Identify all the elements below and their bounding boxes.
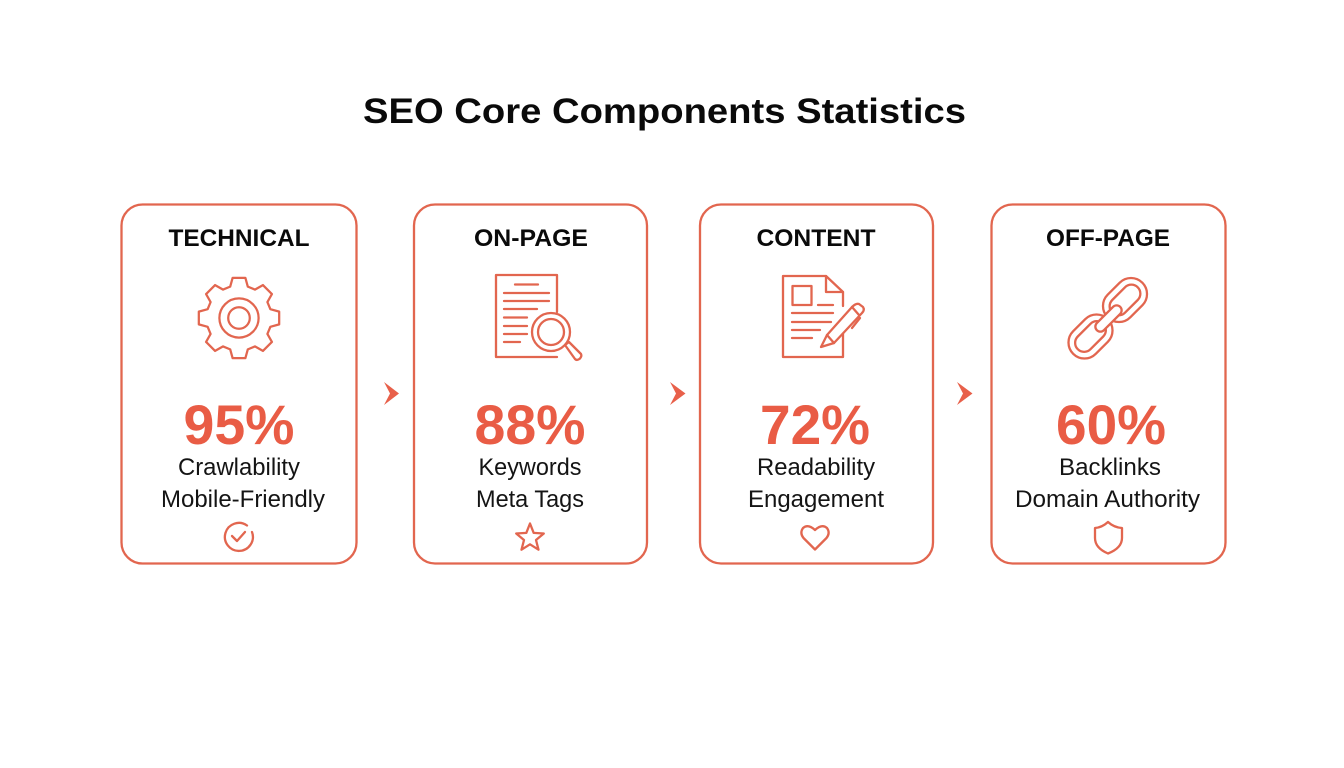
label: domain authority: Domain Authority [1015, 486, 1200, 513]
heading: content: CONTENT [756, 225, 876, 252]
label: readability: Readability [757, 454, 875, 481]
heading: on-page: ON-PAGE [474, 225, 588, 252]
stat: 88%: 88% [474, 393, 586, 456]
icon: check circle [225, 523, 253, 551]
icon: document with magnifier [496, 275, 581, 360]
heading: technical: TECHNICAL [168, 225, 310, 252]
icon: chain link [1062, 271, 1154, 365]
icon: heart [801, 526, 829, 550]
label: keywords: Keywords [478, 454, 582, 481]
icon: shield [1095, 522, 1122, 554]
panel: off-page [992, 204, 1226, 564]
label: crawlability: Crawlability [178, 454, 300, 481]
panel: content [700, 204, 933, 564]
stat: 72%: 72% [760, 393, 870, 456]
arrow 2 [670, 382, 686, 405]
panel: technical [122, 204, 356, 564]
label: meta tags: Meta Tags [476, 486, 584, 513]
title: SEO Core Components Statistics [363, 92, 966, 131]
stat: 95%: 95% [184, 393, 294, 456]
label: engagement: Engagement [748, 486, 884, 513]
arrow 1 [384, 382, 399, 405]
icon: star [516, 524, 544, 550]
heading: off-page: OFF-PAGE [1046, 225, 1170, 252]
icon: gear [199, 278, 279, 358]
label: mobile-friendly: Mobile-Friendly [161, 486, 325, 513]
label: backlinks: Backlinks [1059, 454, 1161, 481]
icon: document with pencil [783, 276, 864, 357]
panel: on-page [414, 204, 647, 564]
stat: 60%: 60% [1056, 393, 1166, 456]
arrow 3 [957, 382, 972, 405]
